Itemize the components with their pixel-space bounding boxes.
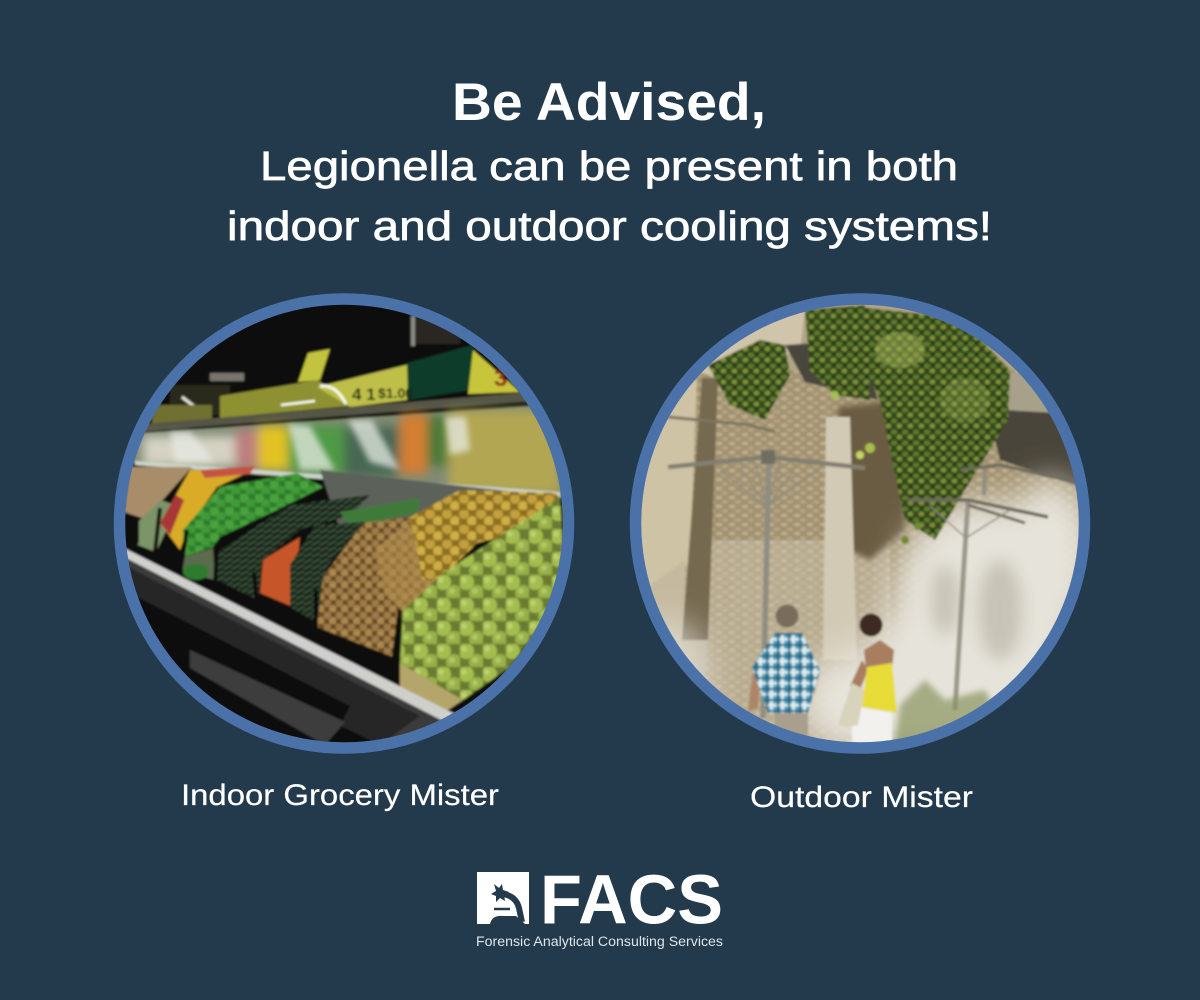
misters: [668, 417, 1075, 718]
pale stone at left edge: [641, 378, 698, 586]
lower counter and rails: [124, 548, 455, 745]
back left mister arm: [668, 417, 775, 432]
green peppers: [183, 473, 323, 557]
subheading line 2: indoor and outdoor cooling systems!: [227, 203, 992, 249]
price signs: 4 1: [352, 385, 376, 404]
white pier: [823, 417, 857, 660]
lower glass bin: [183, 548, 215, 580]
upper tier misted produce: [130, 404, 562, 498]
upper shelf edge: [143, 392, 530, 433]
ginger bin: [124, 467, 192, 518]
photo ring: [120, 299, 568, 748]
yellow and red peppers: [160, 466, 255, 550]
price signs: [152, 345, 520, 425]
wordmark: FACS: [540, 860, 723, 938]
lit shelf band: [135, 461, 560, 497]
bin dividers: [137, 508, 400, 670]
photo ring: [636, 299, 1084, 748]
tree trunk: [682, 378, 718, 640]
mist cloud: [630, 480, 1095, 755]
small green bin: [138, 500, 178, 552]
man: [748, 604, 820, 743]
price signs: 3: [494, 365, 507, 392]
couple walking: [748, 604, 897, 745]
grass: [892, 678, 992, 740]
dark leafy produce: [217, 495, 370, 600]
dark peppers: [290, 522, 365, 622]
glass tray front: [400, 663, 463, 712]
yellow pears: [410, 490, 562, 580]
caption: outdoor: Outdoor Mister: [750, 781, 973, 814]
green pears: [400, 497, 565, 700]
mister pole three: [960, 465, 1075, 495]
logo: FACS: [476, 860, 723, 949]
woman: [838, 614, 897, 745]
price signs: $1.00: [378, 385, 413, 401]
subheading line 1: Legionella can be present in both: [260, 143, 958, 189]
ceiling fixture and distant lights: [170, 316, 460, 419]
foliage: [708, 305, 1010, 544]
upper dark wall and ledge: [785, 340, 1090, 490]
kiwi and brown fruit: [317, 517, 443, 657]
lower display back: [320, 469, 510, 525]
mister pole one: [668, 450, 865, 718]
panel: indoor grocery mister photo: [114, 294, 574, 754]
orange peppers: [260, 537, 300, 607]
stone wall: [686, 370, 1078, 736]
title: [227, 73, 992, 249]
heading: Be Advised: Be Advised,: [452, 73, 766, 132]
caption: indoor: Indoor Grocery Mister: [181, 779, 499, 812]
icon: logo square with microscope: [477, 872, 529, 924]
tagline: Forensic Analytical Consulting Services: [476, 934, 723, 949]
upper pale sky: [700, 312, 806, 377]
panel: outdoor mister photo: [630, 294, 1095, 760]
mister pole two: [908, 500, 1048, 710]
dark shaded wall: [838, 400, 905, 560]
